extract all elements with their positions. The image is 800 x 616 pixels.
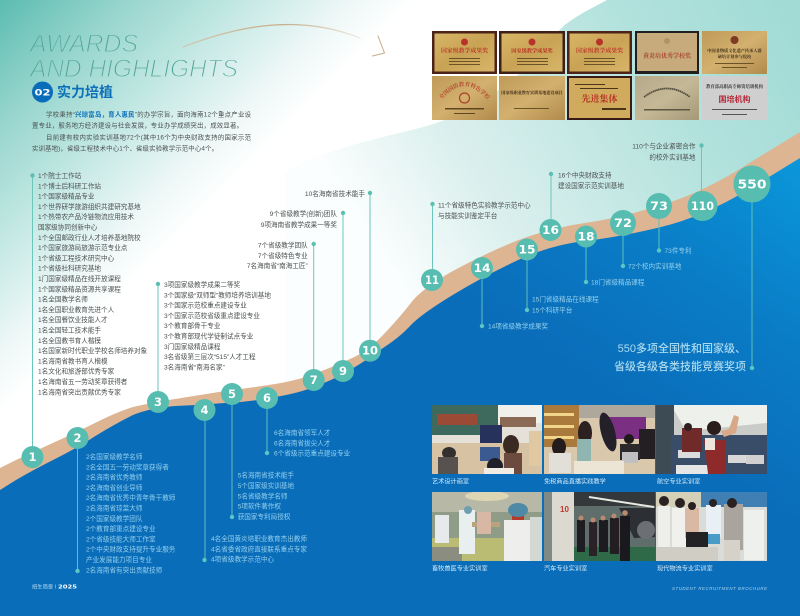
milestone 1: 1个省级工程技术研究中心 xyxy=(38,253,115,262)
milestone 18: 18门省级精品课程 xyxy=(591,278,645,286)
plaque 7 xyxy=(499,76,565,120)
milestone 11 xyxy=(421,200,531,291)
milestone 10 xyxy=(305,189,381,362)
photo: live stream teaching xyxy=(544,405,655,474)
milestone 10: 10 xyxy=(362,344,378,358)
milestone 9 xyxy=(261,209,354,382)
milestone 1: 1个世界研学旅游组织共建研究基地 xyxy=(38,202,141,211)
milestone 3: 3个教育部骨干专业 xyxy=(164,321,221,330)
milestone 14: 14项省级教学成果奖 xyxy=(488,322,548,330)
title: awards and highlights: AND HIGHLIGHTS xyxy=(28,55,238,83)
milestone 1: 1名海南省突出贡献优秀专家 xyxy=(38,387,121,396)
milestone 16: 16 xyxy=(542,223,559,237)
milestone 73: 73件专利 xyxy=(664,246,692,255)
plaque 9 xyxy=(635,76,699,120)
milestone 3: 3名省级第三层次“515”人才工程 xyxy=(164,352,256,361)
title: awards and highlights: AWARDS xyxy=(28,30,138,58)
milestone 6: 6名海南省领军人才 xyxy=(274,428,331,437)
milestone 3 xyxy=(147,280,271,413)
plaque 6: 全国国防教育特色学校 xyxy=(440,82,490,100)
title: awards and highlights xyxy=(28,30,238,83)
plaque 2 xyxy=(499,31,565,74)
plaque 8 xyxy=(567,76,632,120)
milestone 15 xyxy=(516,238,599,314)
milestone 5: 5项软件著作权 xyxy=(238,502,281,511)
milestone 1: 1个院士工作站 xyxy=(38,171,82,180)
timeline stems xyxy=(32,146,752,571)
intro paragraph: 置专业，服务地方经济建设与社会发展，专业办学成绩突出，成效显著。 xyxy=(32,120,243,130)
plaque 5: 中国非物质文化遗产传承人群 xyxy=(707,47,763,54)
milestone 1: 1 xyxy=(28,450,37,464)
milestone 5 xyxy=(221,383,295,521)
photo: auto workshop: 10 xyxy=(560,505,569,514)
milestone 6 xyxy=(256,387,351,458)
milestone 1: 1名全国职业教育先进个人 xyxy=(38,305,115,314)
milestone 11: 与技能实训鉴定平台 xyxy=(438,211,498,220)
milestone 1: 1名海南省教书育人楷模 xyxy=(38,356,108,365)
plaque 3 xyxy=(567,31,632,74)
milestone 7 xyxy=(247,240,325,391)
milestone 1: 1个博士后科研工作站 xyxy=(38,181,101,190)
milestone 2: 2名海南省优秀中青年骨干教师 xyxy=(86,493,176,502)
milestone 1: 国家级协同创新中心 xyxy=(38,222,98,232)
photo captions: 航空专业实训室 xyxy=(657,478,700,486)
milestone 2: 产业发展能力项目专业 xyxy=(86,555,152,564)
heading: 02 实力培植: 实力培植 xyxy=(57,84,113,100)
plaque 6 xyxy=(432,76,497,120)
plaque 10 xyxy=(702,76,767,120)
milestone 1: 1名全国教书育人楷模 xyxy=(38,336,101,345)
plaque 1 xyxy=(432,31,497,74)
milestone 9: 9 xyxy=(339,364,347,378)
intro paragraph: 学校秉持“兴琼富岛，育人惠民”的办学宗旨，面向海南12个重点产业设 xyxy=(46,110,252,118)
milestone 1: 1名文化和旅游部优秀专家 xyxy=(38,367,115,376)
intro paragraph: 实训基地)，省级工程技术中心1个、省级实验教学示范中心4个。 xyxy=(32,144,218,152)
milestone 1: 1个国家旅游局旅游示范专业点 xyxy=(38,243,128,252)
milestone 1: 1名全国轻工技术能手 xyxy=(38,326,101,334)
plaque 2: 国家级教学成果奖 xyxy=(511,46,554,54)
milestone 7: 7 xyxy=(310,373,318,387)
photo: logistics lab xyxy=(656,492,767,561)
blue area xyxy=(0,158,800,616)
milestone 2: 2个省级技能大师工作室 xyxy=(86,534,156,543)
plaque 1: 国家级教学成果奖 xyxy=(441,46,488,54)
milestone 3: 3个国家示范校省级重点建设专业 xyxy=(164,311,260,320)
milestone 72 xyxy=(610,210,682,270)
intro paragraph: 目前建有校内实验实训基地72个(其中16个为中央财政支持的国家示范 xyxy=(46,132,252,142)
milestone 4: 4 xyxy=(200,403,209,417)
milestone 9: 9个省级教学(创新)团队 xyxy=(270,209,337,218)
milestone 110: 110 xyxy=(691,199,714,213)
milestone 3: 3项国家级教学成果二等奖 xyxy=(164,280,241,289)
milestone 2: 2 xyxy=(73,431,82,445)
milestone 15: 15个科研平台 xyxy=(532,306,573,314)
milestone 16: 建设国家示范实训基地 xyxy=(558,181,624,190)
milestone 550: 550多项全国性和国家级、 xyxy=(618,341,746,355)
milestone 2: 2名海南省创业导师 xyxy=(86,483,143,492)
milestone 73: 73 xyxy=(650,199,668,213)
milestone 550: 省级各级各类技能竞赛奖项 xyxy=(614,359,746,373)
milestone 73 xyxy=(646,193,692,255)
milestone 4: 4名全国黄炎培职业教育杰出教师 xyxy=(211,534,307,543)
milestone 5: 5名省级教学名师 xyxy=(238,491,288,500)
photo: veterinary lab xyxy=(432,491,542,561)
milestone 6: 6名海南省拔尖人才 xyxy=(274,438,331,447)
milestone 4: 4名省委省政府直接联系重点专家 xyxy=(211,544,307,553)
milestone 1: 1名全国餐饮业技能人才 xyxy=(38,315,108,324)
milestone 110: 的校外实训基地 xyxy=(649,152,696,162)
milestone 5: 5个国家级实训基地 xyxy=(238,481,295,490)
milestone 11: 11 xyxy=(425,273,439,287)
milestone 14: 14 xyxy=(474,261,490,275)
photo captions: 畜牧兽医专业实训室 xyxy=(432,564,488,572)
milestone 1: 1个国家级精品专业 xyxy=(38,192,95,201)
footer right: STUDENT RECRUITMENT BROCHURE xyxy=(672,586,767,591)
intro paragraph xyxy=(32,110,252,152)
milestone 72: 72 xyxy=(614,216,632,230)
photo captions: 艺术设计画室 xyxy=(432,478,469,486)
milestone 2: 2名全国五一劳动奖章获得者 xyxy=(86,462,169,471)
milestone 1: 1门国家级精品在线开放课程 xyxy=(38,274,121,283)
milestone 18: 18 xyxy=(578,230,594,244)
milestone 3: 3个国家级“双师型”教师培养培训基地 xyxy=(164,290,271,299)
plaque 8: 先进集体 xyxy=(581,93,618,104)
plaque 7: 国家级职业教育实训基地建设项目 xyxy=(501,89,563,95)
milestone 1: 1名全国教学名师 xyxy=(38,295,88,304)
milestone 1: 1名海南省五一劳动奖章获得者 xyxy=(38,377,128,386)
milestone 1: 1个全国邮政行业人才培养基地院校 xyxy=(38,233,141,242)
plaque 5: 研培计划参与院校 xyxy=(718,53,752,60)
milestone 2: 2名海南省优秀教师 xyxy=(86,473,143,482)
plaque 10: 国培机构 xyxy=(718,94,750,104)
milestone 2: 2名海南省琼菜大师 xyxy=(86,504,143,512)
milestone 15: 15 xyxy=(518,242,536,256)
milestone 10: 10名海南省技术能手 xyxy=(305,189,365,198)
milestone 7: 7个省级特色专业 xyxy=(258,251,308,260)
milestone 11: 11个省级特色实验教学示范中心 xyxy=(438,200,531,210)
heading: 02 实力培植: 02 xyxy=(34,88,50,98)
tan ribbon xyxy=(0,132,800,616)
heading: 02 实力培植 xyxy=(32,82,113,102)
photo captions: 汽车专业实训室 xyxy=(544,564,587,572)
milestone 7: 7名海南省“南海工匠” xyxy=(247,261,308,270)
milestone 18 xyxy=(575,226,645,286)
milestone 6: 6个省级示范重点建设专业 xyxy=(274,449,351,458)
milestone 2: 2个教育部重点建设专业 xyxy=(86,524,156,533)
milestone 1: 1个热带农产品冷链物流应用技术 xyxy=(38,212,134,221)
milestone 1: 1名国家新时代职业学校名师培养对象 xyxy=(38,346,148,355)
milestone 3: 3名海南省“南海名家” xyxy=(164,362,225,371)
arrow xyxy=(183,24,384,56)
milestone 2 xyxy=(66,427,176,574)
photo: aviation training xyxy=(656,405,767,474)
plaque 10: 教育部高职高专师资培训机构 xyxy=(706,83,764,90)
milestone 7: 7个省级教学团队 xyxy=(258,240,308,250)
milestone 3: 3个国家示范校重点建设专业 xyxy=(164,301,247,310)
photo: art studio xyxy=(432,405,542,474)
footer left: 招生简章 I xyxy=(32,582,56,590)
milestone 5: 5 xyxy=(228,387,236,401)
photo captions: 现代物流专业实训室 xyxy=(657,564,713,572)
milestone 1 xyxy=(22,171,148,468)
milestone 110: 110个与企业紧密合作 xyxy=(632,142,696,150)
milestone 1: 1个省级社科研究基地 xyxy=(38,264,101,273)
plaque 5 xyxy=(702,31,767,74)
milestone 16 xyxy=(540,170,624,241)
plaque 4 xyxy=(635,31,699,74)
footer left xyxy=(32,582,77,590)
milestone 6: 6 xyxy=(263,391,271,405)
milestone 3: 3个教育部现代学徒制试点专业 xyxy=(164,332,254,340)
plaque 4: 黄炎培优秀学校奖 xyxy=(643,52,691,60)
milestone 72: 72个校内实训基地 xyxy=(628,262,682,270)
milestone 2: 2个中央财政支持提升专业服务 xyxy=(86,545,176,554)
photo captions: 免税商品直播实践教学 xyxy=(544,478,606,486)
milestone 5: 5名海南省技术能手 xyxy=(238,471,295,480)
milestone 3: 3 xyxy=(154,395,162,409)
milestone 15: 15门省级精品在线课程 xyxy=(532,294,599,304)
milestone 9: 9项海南省教学成果一等奖 xyxy=(261,220,337,229)
milestone 2: 2名国家级教学名师 xyxy=(86,452,143,461)
milestone 2: 2个国家级教学团队 xyxy=(86,514,143,523)
milestone 110 xyxy=(632,142,718,221)
milestone 550 xyxy=(614,166,770,373)
footer left: 2025 xyxy=(58,584,77,590)
award plaques xyxy=(432,31,767,120)
photo captions xyxy=(432,478,713,572)
milestone 5: 获国家专利局授权 xyxy=(238,512,291,521)
milestone 1: 1个国家级精品资源共享课程 xyxy=(38,284,121,293)
milestone 3: 3门国家级精品课程 xyxy=(164,342,221,351)
milestone 550: 550 xyxy=(738,176,767,192)
milestone 14 xyxy=(471,257,548,330)
plaque 3: 国家级教学成果奖 xyxy=(576,46,623,54)
milestone 4 xyxy=(194,399,307,564)
milestone 2: 2名海南省有突出贡献技师 xyxy=(86,565,163,574)
milestone 4: 4项省级教学示范中心 xyxy=(211,555,274,564)
milestone 16: 16个中央财政支持 xyxy=(558,170,612,180)
photo: auto workshop xyxy=(544,492,655,561)
